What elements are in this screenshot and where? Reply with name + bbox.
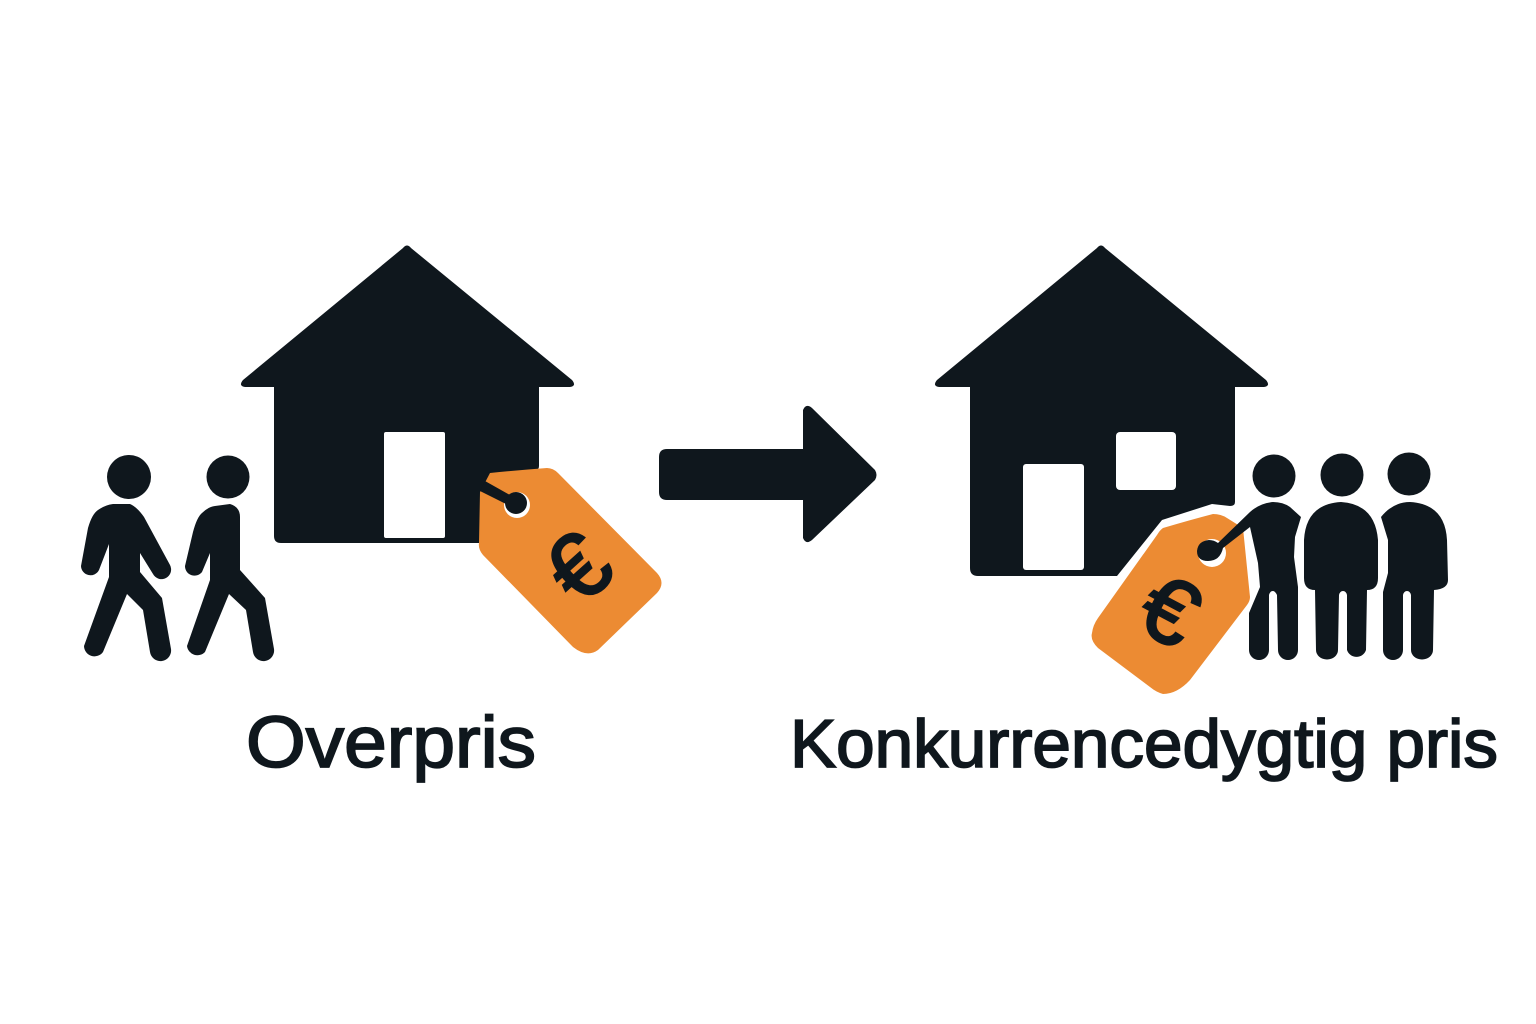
euro sign on right tag: € [1123, 554, 1216, 668]
icon: left house [241, 246, 574, 543]
label: Overpris: Overpris [246, 703, 536, 783]
icon: group of three people [1197, 452, 1448, 660]
icon: left price tag [479, 468, 662, 653]
euro sign on left tag: € [526, 513, 632, 623]
arrow [659, 406, 876, 542]
left scene: overpriced house [81, 246, 662, 661]
icon: two walking people [81, 455, 274, 661]
right scene: competitively priced house [935, 246, 1448, 694]
label: Konkurrencedygtig pris: Konkurrencedygtig pris [790, 706, 1498, 782]
icon: right price tag [1092, 514, 1250, 694]
icon: right house [935, 246, 1268, 576]
